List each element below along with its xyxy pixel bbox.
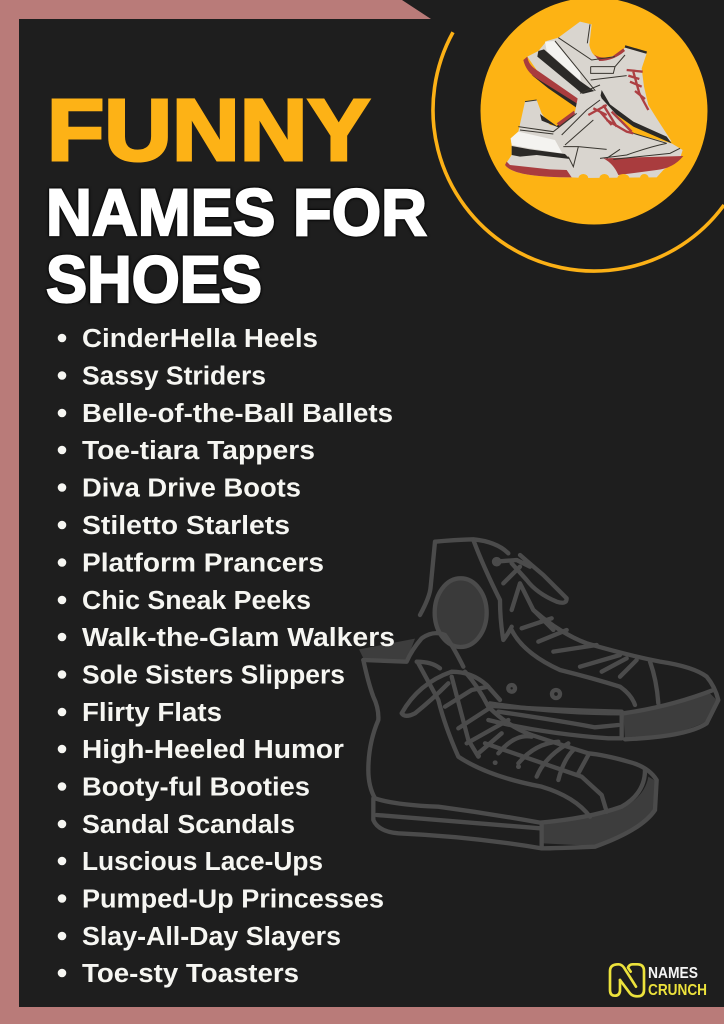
bottom sneaker bbox=[505, 90, 683, 178]
item 5: Diva Drive Boots bbox=[82, 474, 301, 502]
item 17: Slay-All-Day Slayers bbox=[82, 923, 341, 951]
title line: SHOES: SHOES bbox=[46, 242, 262, 316]
item 8: Chic Sneak Peeks bbox=[82, 587, 311, 615]
list of funny shoe names bbox=[58, 325, 395, 988]
item 10: Sole Sisters Slippers bbox=[82, 662, 345, 690]
item 12: High-Heeled Humor bbox=[82, 736, 344, 764]
front high-top bbox=[359, 633, 657, 848]
item 3: Belle-of-the-Ball Ballets bbox=[82, 400, 393, 428]
item 7: Platform Prancers bbox=[82, 550, 324, 578]
decorative ring arc bbox=[433, 32, 724, 271]
item 4: Toe-tiara Tappers bbox=[82, 437, 315, 465]
title line: NAMES FOR: NAMES FOR bbox=[46, 175, 427, 249]
item 2: Sassy Striders bbox=[82, 362, 266, 390]
title bbox=[46, 82, 427, 316]
item 14: Sandal Scandals bbox=[82, 811, 295, 839]
icon: pair of sneakers bbox=[505, 22, 683, 178]
yellow circle badge bbox=[480, 0, 708, 224]
logo wordmark: NAMES: NAMES bbox=[648, 965, 698, 982]
item 9: Walk-the-Glam Walkers bbox=[82, 624, 395, 652]
back high-top bbox=[420, 539, 718, 739]
item 16: Pumped-Up Princesses bbox=[82, 886, 384, 914]
top sneaker bbox=[523, 22, 672, 143]
item 1: CinderHella Heels bbox=[82, 325, 318, 353]
item 15: Luscious Lace-Ups bbox=[82, 848, 323, 876]
logo icon: N mark bbox=[610, 964, 644, 996]
watermark: high-top sneakers sketch bbox=[359, 539, 718, 848]
logo wordmark: CRUNCH: CRUNCH bbox=[648, 982, 707, 999]
logo: Names Crunch bbox=[610, 964, 707, 999]
item 6: Stiletto Starlets bbox=[82, 512, 290, 540]
item 11: Flirty Flats bbox=[82, 699, 222, 727]
item 18: Toe-sty Toasters bbox=[82, 960, 299, 988]
title line: FUNNY: FUNNY bbox=[47, 82, 370, 179]
item 13: Booty-ful Booties bbox=[82, 774, 310, 802]
